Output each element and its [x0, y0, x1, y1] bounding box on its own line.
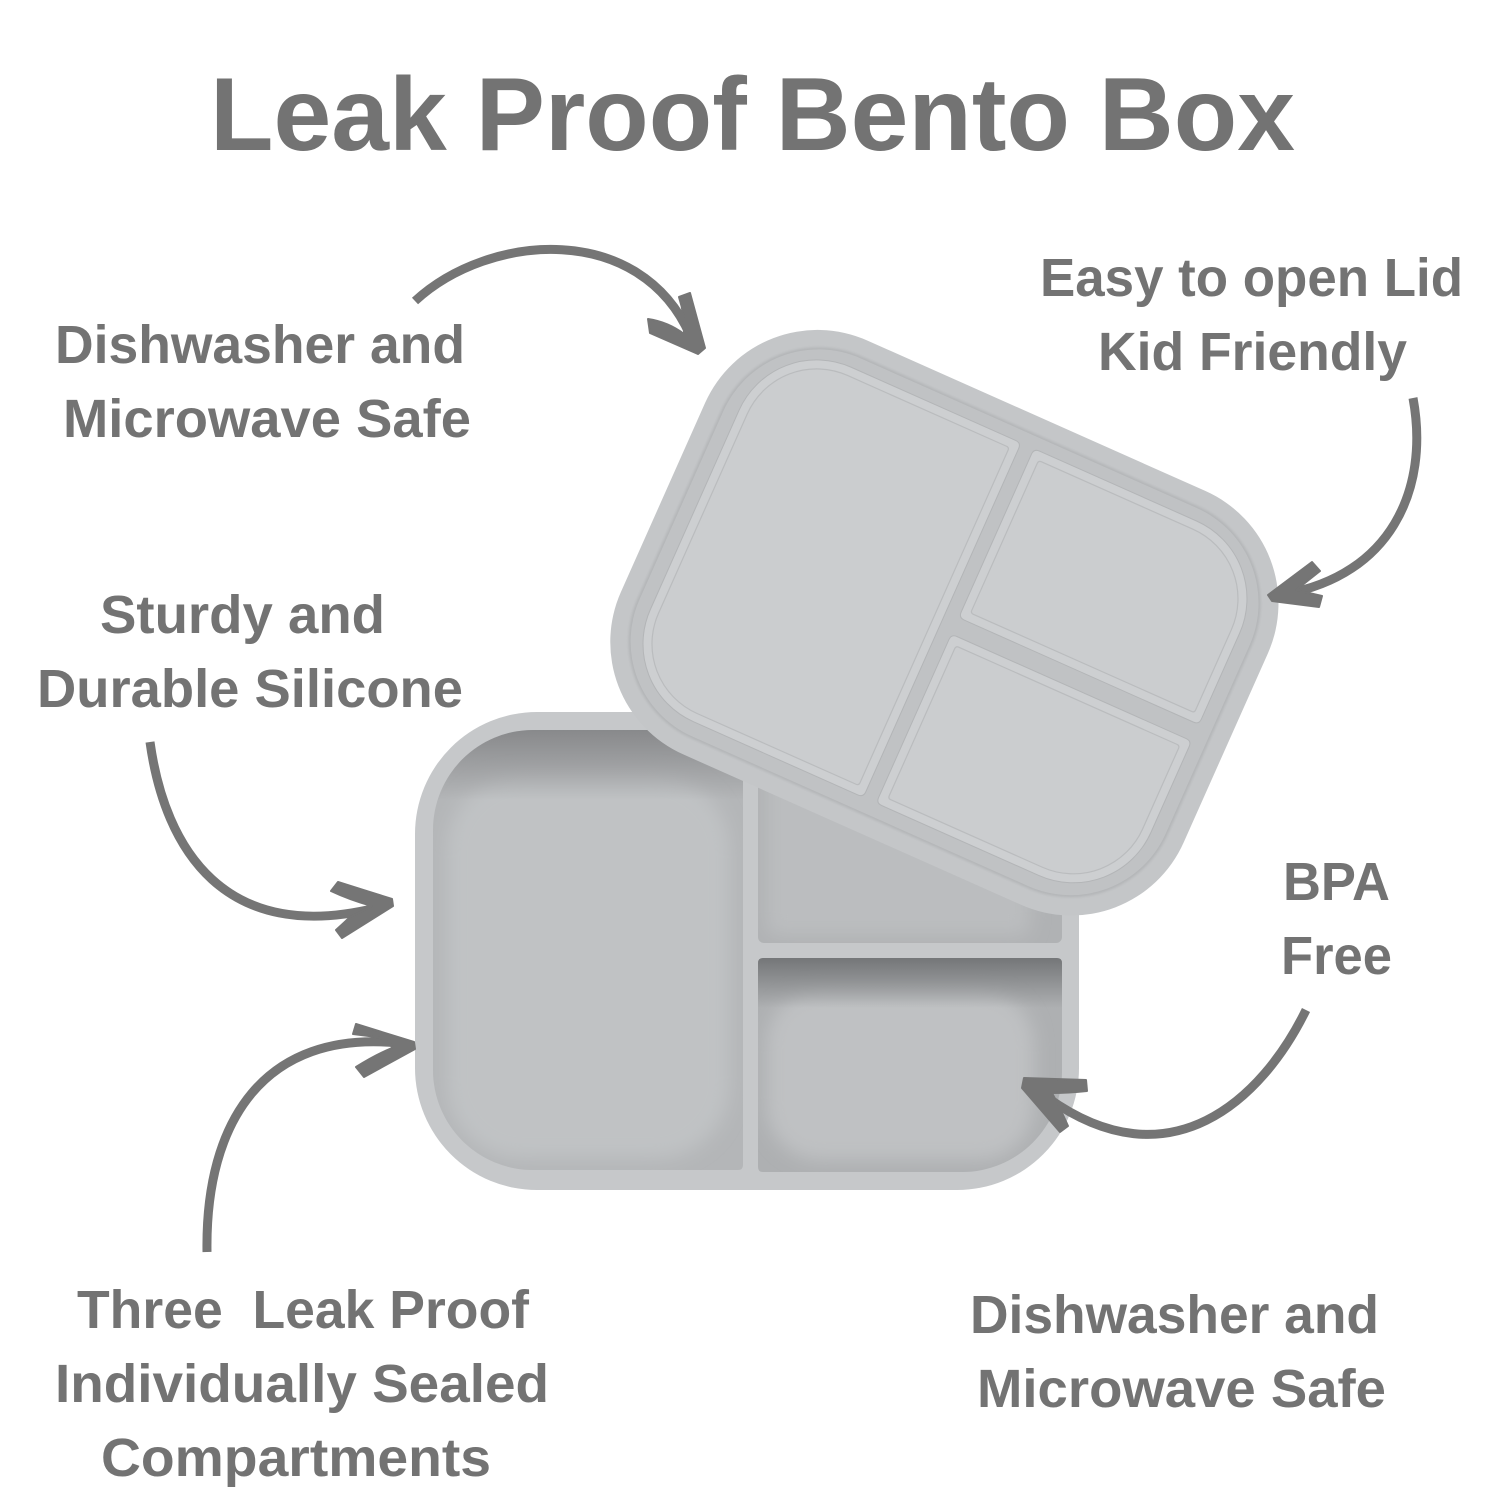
lid upper right panel: [959, 449, 1274, 725]
text block: dishwasher and microwave safe (bottom right): Dishwasher and: [970, 1285, 1379, 1345]
text block: dishwasher and microwave safe (bottom right): [970, 1285, 1386, 1419]
text block: BPA free: BPA: [1283, 852, 1390, 912]
left compartment: [425, 725, 750, 1175]
bento box lid: [571, 291, 1318, 955]
text block: three leak proof compartments: Three Leak Proof: [77, 1280, 530, 1340]
text block: dishwasher and microwave safe (bottom right): Microwave Safe: [977, 1359, 1386, 1419]
arrow: to lid from top left: [415, 249, 705, 354]
text block: sturdy and durable silicone: [37, 585, 463, 719]
bento box base: [415, 712, 1079, 1190]
text block: three leak proof compartments: Compartments: [101, 1428, 491, 1488]
lower right compartment: [755, 955, 1067, 1175]
text block: easy to open lid: Easy to open Lid: [1040, 248, 1463, 308]
text block: easy to open lid: [1040, 248, 1463, 382]
arrow: to lid from right: [1268, 398, 1417, 607]
text block: BPA free: [1281, 852, 1392, 986]
text block: BPA free: Free: [1281, 926, 1392, 986]
text block: three leak proof compartments: Individually Sealed: [55, 1354, 549, 1414]
text block: three leak proof compartments: [55, 1280, 549, 1488]
text block: dishwasher and microwave safe (top left): Dishwasher and: [55, 315, 465, 375]
arrow: to base from sturdy silicone: [150, 742, 393, 938]
upper right compartment: [758, 788, 1062, 943]
arrow: to base from compartments: [207, 1024, 415, 1252]
text block: dishwasher and microwave safe (top left): Microwave Safe: [63, 389, 471, 449]
text block: dishwasher and microwave safe (top left): [55, 315, 471, 449]
lid large panel: [616, 333, 1021, 797]
text block: sturdy and durable silicone: Durable Silicone: [37, 659, 463, 719]
lid lower right panel: [876, 634, 1192, 910]
arrow: to base from BPA free: [1022, 1010, 1306, 1134]
title: Leak Proof Bento Box: [210, 57, 1295, 173]
text block: sturdy and durable silicone: Sturdy and: [100, 585, 385, 645]
text block: easy to open lid: Kid Friendly: [1098, 322, 1407, 382]
